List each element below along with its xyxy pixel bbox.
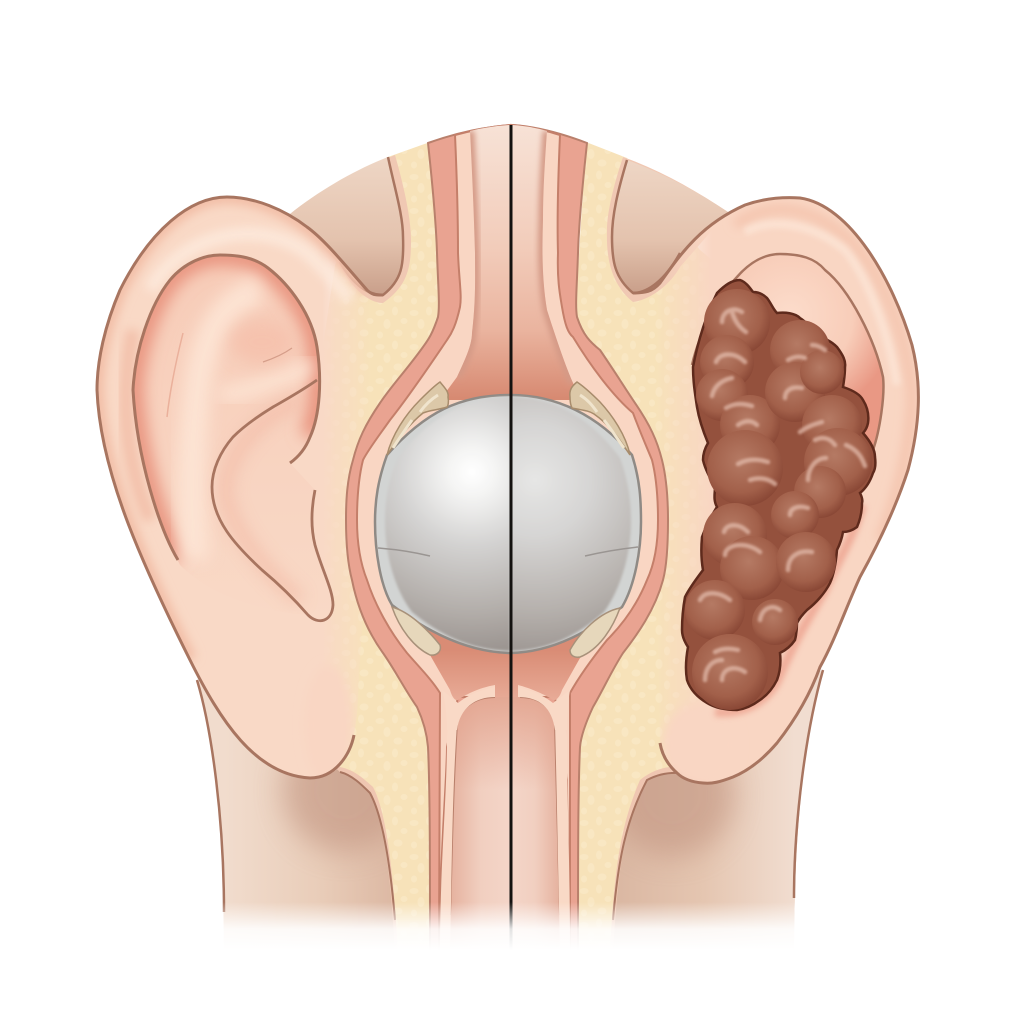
right ear [633, 198, 918, 787]
skin pocket: upper right [607, 157, 728, 302]
left ear [97, 197, 383, 785]
skin pocket: upper left [290, 155, 411, 303]
lumen: lower left [450, 697, 510, 955]
ossicle tissue: bottom left [392, 607, 440, 655]
wax lumps [685, 289, 872, 710]
wax highlights [700, 310, 865, 680]
lumen: upper left [440, 125, 510, 400]
stem: right [555, 700, 570, 955]
outline: right ear [633, 198, 918, 783]
concha: left ear [134, 256, 318, 604]
ossicle tissue: bottom right [570, 608, 620, 657]
lumen: lower right [512, 697, 560, 955]
concha: right ear [738, 256, 882, 446]
fat tissue: left [300, 142, 445, 955]
fat tissue: right [570, 142, 760, 955]
stem: left [440, 700, 457, 955]
outline: left ear [97, 197, 383, 778]
center divider line [510, 125, 512, 950]
lumen: middle right [512, 620, 615, 700]
neck: right [610, 670, 823, 955]
canal wall: right [512, 125, 668, 955]
halo around wax [715, 505, 862, 712]
neck: left [196, 680, 396, 934]
antihelix and tragus line [212, 380, 333, 621]
anatomical illustration: ear comparison [96, 124, 920, 944]
ossicle tissue: top right [570, 382, 630, 455]
lumen: middle left [400, 620, 510, 700]
bottom fade [180, 902, 840, 962]
lumen: upper right [512, 125, 580, 400]
earwax mass [682, 280, 875, 710]
canal wall: left [346, 125, 510, 955]
ossicle tissue: top left [387, 382, 448, 455]
sphere: eardrum bulge [375, 395, 641, 653]
